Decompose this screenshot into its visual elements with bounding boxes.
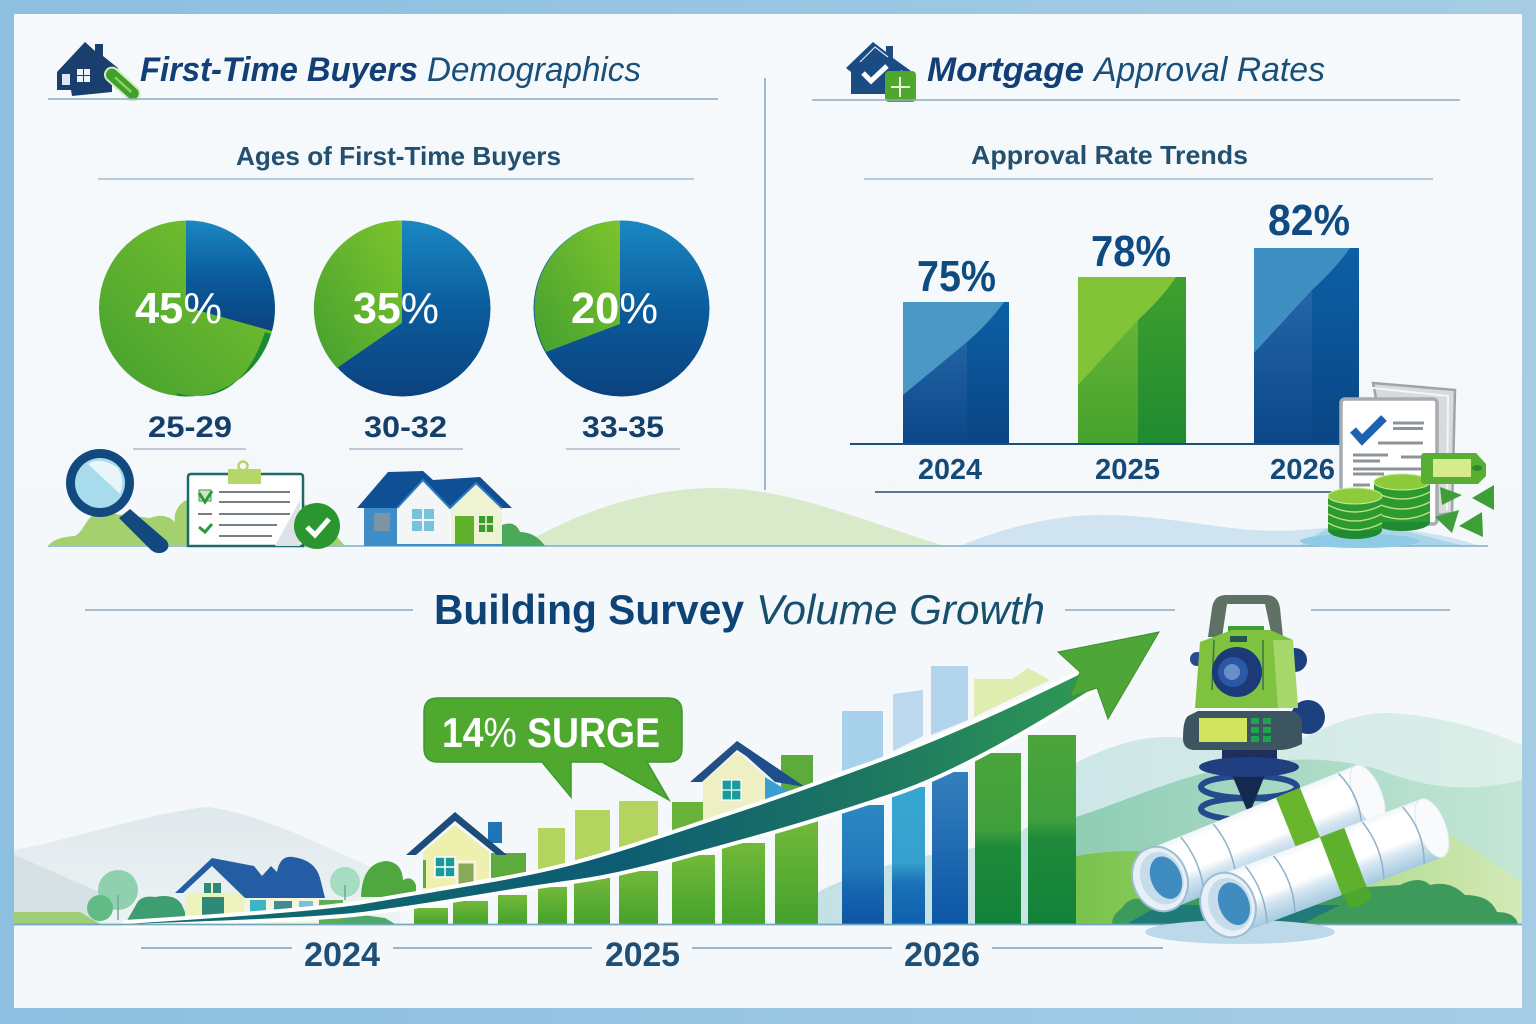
year labels: 2025 [1095,454,1160,486]
ground line [14,924,1522,926]
age labels: 25-29 [148,411,232,444]
pie chart: 35% ages 30-32: 35% [353,284,439,333]
icon: clipboard checklist [188,462,303,546]
bar: 2025 approval 78%: 78% [1091,227,1171,276]
bars: 2024-2025 lower green [414,819,818,924]
panel: mortgage approval rates [812,42,1460,492]
scene: right hills [818,713,1522,925]
heading: building survey volume growth: Volume Growth [756,586,1045,633]
year labels: 2026 [1270,454,1335,486]
icon: second house (2025) [406,812,507,890]
pie chart: 20% ages 33-35: 20% [571,284,658,333]
callout: 14% surge: 14% SURGE [442,709,660,756]
icon: third house (2025-2026) [690,741,805,825]
panel: first-time buyers demographics [48,42,718,449]
blueprint roll: front [1191,792,1462,959]
icon: rolled blueprints [1123,759,1462,959]
icon: first house (2024) [175,857,343,924]
year timeline labels: 2025 [605,936,680,974]
icon: price tag and arrow shards [1421,453,1494,537]
icon: house with check and plus [846,42,916,102]
icon: bushes behind magnifier [48,497,345,546]
scene: trees and bushes [87,861,416,924]
icon: coin stacks [1300,474,1430,548]
icon: surveying total station [1183,595,1325,820]
year timeline labels [304,936,980,974]
blueprint roll: back [1123,759,1393,920]
year labels [918,454,1335,486]
pie chart: 45% ages 25-29 [99,220,275,396]
pie chart: 20% ages 33-35 [534,220,710,396]
icon: house cluster [357,471,545,546]
growth arrow [125,632,1159,926]
subheading: ages: Ages of First-Time Buyers [236,141,561,171]
bar: 2024 approval 75% [903,252,1009,444]
pie chart: 35% ages 30-32 [314,220,490,396]
heading: first-time buyers demographics [140,51,641,89]
scene: left mountains [14,807,400,924]
heading: building survey volume growth: Building Survey [434,586,745,633]
scene: middle hills and ground [48,488,1488,546]
heading: mortgage approval rates: Approval Rates [1092,51,1325,89]
bar: 2026 approval 82%: 82% [1268,196,1350,245]
year labels: 2024 [918,454,982,486]
bar: 2025 approval 78% [1078,227,1186,444]
callout: 14% surge [424,698,682,800]
bar: 2024 approval 75%: 75% [917,252,996,301]
year timeline labels: 2024 [304,936,380,974]
age labels: 33-35 [582,411,664,444]
year timeline labels: 2026 [904,936,980,974]
bars: 2026 lower blue and green [842,735,1076,924]
heading: mortgage approval rates [927,51,1325,89]
icon: document stack [1341,383,1455,524]
bar: 2026 approval 82% [1254,196,1359,444]
age labels: 30-32 [364,411,447,444]
icon: magnifying glass [66,449,168,553]
age labels [148,411,664,444]
heading: first-time buyers demographics: Demographics [427,51,641,89]
panel: building survey volume growth [14,586,1522,974]
subheading: approval rate trends: Approval Rate Trends [971,140,1248,170]
heading: first-time buyers demographics: First-Time Buyers [140,51,418,89]
bars: 2026 upper pale [842,666,1050,771]
bars: 2025 upper lime [491,755,813,878]
divider between top panels [764,78,766,490]
icon: green check badge [294,503,340,549]
pie chart: 45% ages 25-29: 45% [135,284,222,333]
icon: house with pencil [57,42,143,103]
heading: mortgage approval rates: Mortgage [927,51,1084,89]
heading: building survey volume growth [434,586,1045,633]
